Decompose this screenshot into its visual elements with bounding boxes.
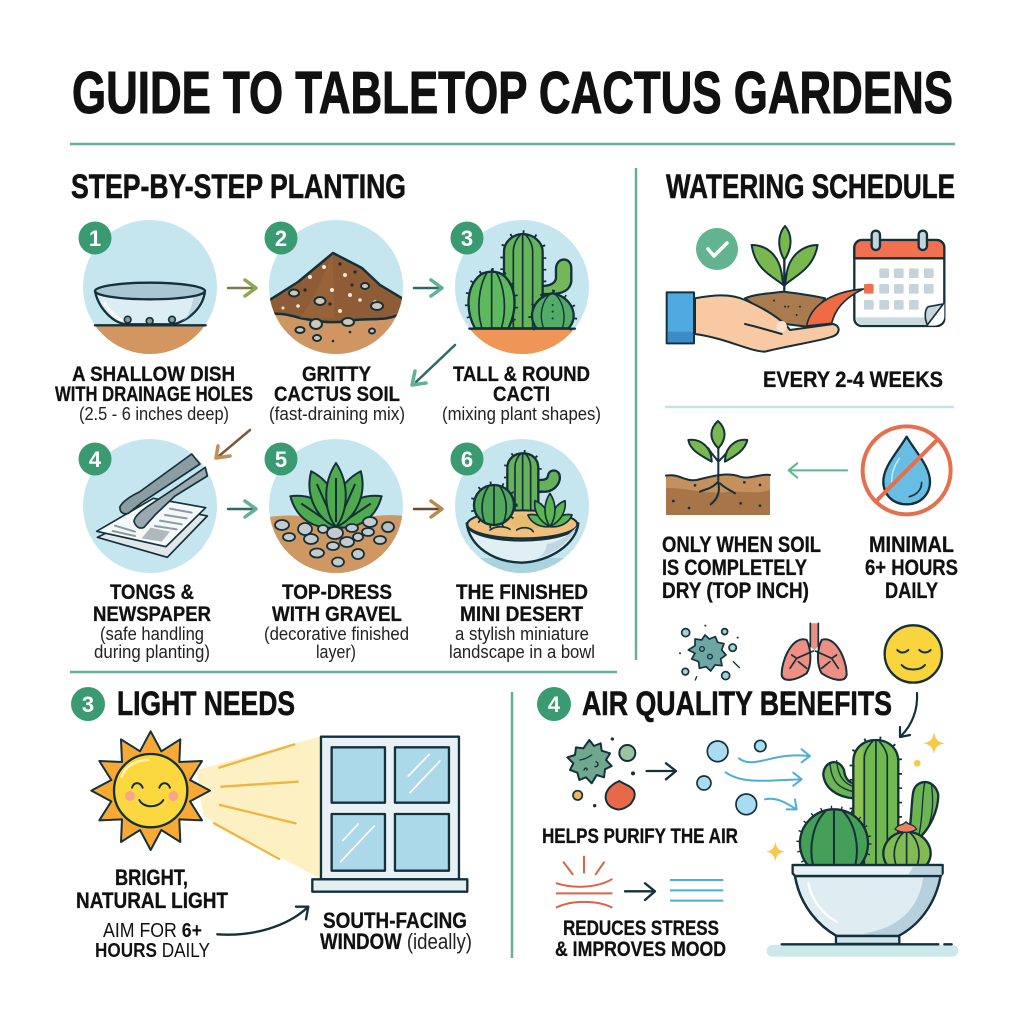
step 5 caption: (decorative finished xyxy=(264,624,409,644)
heading: light needs: LIGHT NEEDS xyxy=(117,685,295,723)
illustration: cacti in white bowl xyxy=(766,732,958,957)
icon: hand holding seedling xyxy=(667,226,863,352)
step 5 caption: layer) xyxy=(316,642,356,662)
arrow 3 to 4 (upper segment) xyxy=(412,345,455,385)
step 5 badge: 5 xyxy=(275,447,287,472)
step 1 caption: WITH DRAINAGE HOLES xyxy=(55,382,253,406)
step 2 caption: CACTUS SOIL xyxy=(274,382,400,406)
caption: only when soil is completely dry: IS COMPLETELY xyxy=(662,555,807,580)
caption: minimal 6+ hours daily: DAILY xyxy=(885,578,938,603)
step 6 badge: 6 xyxy=(461,447,473,472)
caption: only when soil is completely dry: DRY (TOP INCH) xyxy=(662,578,809,603)
arrow 1 to 2 xyxy=(228,280,256,296)
step 6 caption xyxy=(449,580,595,662)
icon: calm smiley xyxy=(885,625,942,683)
caption: bright natural light: BRIGHT, xyxy=(115,865,188,890)
step 3 caption: TALL & ROUND xyxy=(453,362,590,386)
label: reduces stress and improves mood: REDUCES STRESS xyxy=(563,916,719,940)
icon: no water drop xyxy=(863,426,951,514)
heading: step-by-step planting: STEP-BY-STEP PLANTING xyxy=(71,168,406,206)
caption: south-facing window xyxy=(320,908,472,954)
step 3 badge: 3 xyxy=(461,226,473,251)
panel: watering schedule xyxy=(662,168,958,603)
step 2 caption: (fast-draining mix) xyxy=(269,404,405,424)
step 1 caption: A SHALLOW DISH xyxy=(72,362,235,386)
arrow: pollutants to clean air xyxy=(647,763,676,779)
step 6 caption: THE FINISHED xyxy=(456,580,588,604)
arrow 5 to 6 xyxy=(414,501,442,517)
heading: air quality benefits: AIR QUALITY BENEFITS xyxy=(582,685,892,723)
caption: minimal 6+ hours daily: MINIMAL xyxy=(869,532,954,557)
step 2 caption: GRITTY xyxy=(302,362,371,386)
caption: south-facing window: WINDOW (ideally) xyxy=(320,929,472,954)
step 6 caption: MINI DESERT xyxy=(460,602,583,626)
icon: window xyxy=(312,737,467,892)
step 3 badge xyxy=(450,222,484,254)
step 6 caption: a stylish miniature xyxy=(455,624,589,644)
icon: check mark xyxy=(696,228,738,270)
icon: light beam xyxy=(197,737,320,878)
panel: air quality benefits xyxy=(537,685,958,961)
step 5 caption: WITH GRAVEL xyxy=(272,602,402,626)
caption: bright natural light xyxy=(76,865,228,913)
icon: pollutants xyxy=(567,737,635,809)
step 6 illustration: finished mini desert xyxy=(455,439,595,578)
icon: smiling sun xyxy=(91,731,210,850)
caption: minimal 6+ hours daily: 6+ HOURS xyxy=(865,555,958,580)
step 2 caption xyxy=(269,362,405,424)
icon: air particles xyxy=(679,625,739,680)
label: reduces stress and improves mood: & IMPROVES MOOD xyxy=(555,937,726,961)
label: every 2-4 weeks: EVERY 2-4 WEEKS xyxy=(763,367,943,392)
icon: lungs xyxy=(782,623,847,680)
step 3 caption: CACTI xyxy=(493,382,550,406)
step 4 caption xyxy=(93,580,211,662)
caption: bright natural light: NATURAL LIGHT xyxy=(76,888,228,913)
caption: aim for 6+ hours daily xyxy=(95,919,210,962)
step 3 caption: (mixing plant shapes) xyxy=(442,404,601,424)
step 2 illustration: gritty cactus soil xyxy=(269,220,403,354)
icon: calendar xyxy=(854,231,944,326)
step 1 badge xyxy=(78,222,112,254)
step 5 caption xyxy=(264,580,409,662)
section badge 3 xyxy=(71,687,105,721)
caption: south-facing window: SOUTH-FACING xyxy=(323,908,467,933)
caption: aim for 6+ hours daily: AIM FOR 6+ xyxy=(103,919,202,942)
step 1 illustration: shallow dish xyxy=(80,220,220,360)
icon: seedling in dry soil xyxy=(666,421,770,515)
step 4 caption: NEWSPAPER xyxy=(93,602,211,626)
arrow 2 to 3 xyxy=(414,280,442,296)
icon: stress to calm lines xyxy=(557,857,723,907)
section badge 3: 3 xyxy=(82,692,94,717)
step 3 illustration: tall and round cacti xyxy=(455,220,589,354)
step 4 caption: during planting) xyxy=(94,642,210,662)
arrow: from no water to soil xyxy=(789,463,847,478)
step 4 caption: TONGS & xyxy=(110,580,194,604)
step 5 badge xyxy=(264,442,298,476)
step 1 badge: 1 xyxy=(89,226,101,251)
step 5 caption: TOP-DRESS xyxy=(282,580,392,604)
caption: minimal 6+ hours daily xyxy=(865,532,958,603)
step 4 badge xyxy=(78,442,112,476)
sparkles xyxy=(766,732,945,862)
section badge 4: 4 xyxy=(548,692,561,717)
step 6 badge xyxy=(450,442,484,476)
panel: light needs xyxy=(71,685,472,962)
arrow 4 to 5 xyxy=(228,501,256,517)
step 5 illustration: top-dress with gravel xyxy=(269,439,403,573)
caption: only when soil is completely dry xyxy=(662,532,821,603)
icon: clean air bubbles and breeze xyxy=(697,740,810,815)
step 4 badge: 4 xyxy=(89,447,102,472)
arrow: toward window xyxy=(217,907,308,935)
caption: only when soil is completely dry: ONLY WHEN SOIL xyxy=(662,532,821,557)
panel: step-by-step planting xyxy=(55,168,601,662)
label: helps purify the air: HELPS PURIFY THE AIR xyxy=(542,824,738,848)
arrow 3 to 4 (lower segment) xyxy=(216,430,250,458)
step 3 caption xyxy=(442,362,601,424)
step 1 caption: (2.5 - 6 inches deep) xyxy=(79,404,229,424)
label: reduces stress and improves mood xyxy=(555,916,726,961)
arrow: benefits down to cactus xyxy=(900,693,917,737)
step 2 badge xyxy=(264,222,298,254)
step 4 caption: (safe handling xyxy=(100,624,204,644)
step 6 caption: landscape in a bowl xyxy=(449,642,595,662)
step 4 illustration: tongs and newspaper xyxy=(83,439,217,573)
step 1 caption xyxy=(55,362,253,424)
caption: aim for 6+ hours daily: HOURS DAILY xyxy=(95,939,210,962)
step 2 badge: 2 xyxy=(275,226,287,251)
section badge 4 xyxy=(537,687,571,721)
